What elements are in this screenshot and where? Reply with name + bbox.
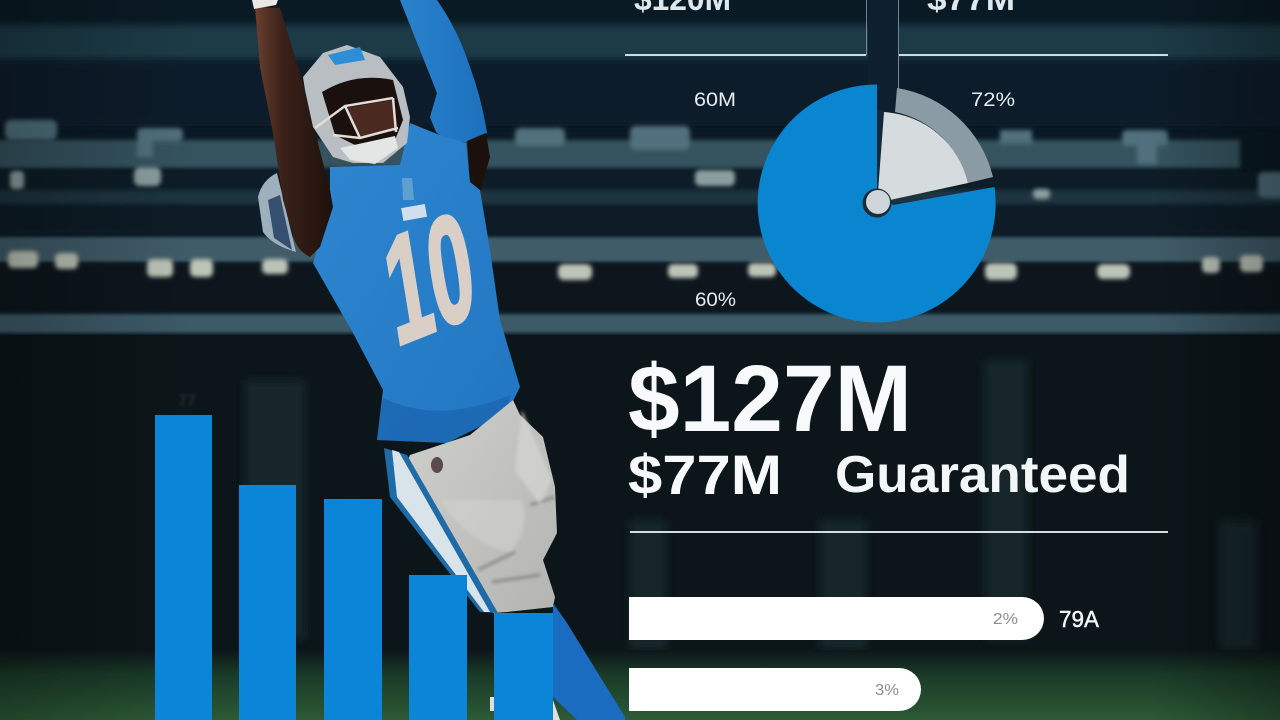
player: wristband: [252, 0, 278, 9]
player: raised right arm sleeve: [400, 0, 487, 142]
pie chart: [758, 84, 996, 322]
pie: grey outer slice: [895, 88, 993, 183]
bar 4: [409, 575, 467, 720]
bar 3: [324, 499, 382, 720]
player: lower leg: [553, 603, 625, 720]
progress bar 1 side label: 79A: [1059, 606, 1100, 632]
player: raised arm: [255, 7, 333, 257]
player: upper arm behind jersey: [467, 133, 490, 192]
headline: guaranteed amount: $77M: [628, 443, 782, 506]
pie label: bottom left: 60%: [695, 290, 736, 311]
player: [252, 0, 625, 720]
divider: [630, 531, 1168, 533]
pie label: top left: 60M: [694, 90, 736, 111]
player: jersey hem shading: [377, 395, 510, 443]
pie: center hub: [862, 188, 892, 218]
pie: dark notch: [877, 110, 884, 192]
bar 5: [494, 613, 553, 720]
progress bar 2: [629, 668, 921, 711]
top divider frame: [625, 0, 1168, 112]
player: pants: [384, 400, 557, 613]
progress bar 1: [629, 597, 1044, 640]
player: back sleeve: [258, 173, 296, 252]
headline: guaranteed label: Guaranteed: [835, 446, 1130, 504]
progress bar 1 value: 2%: [993, 611, 1018, 628]
player: jersey: [313, 123, 520, 443]
progress bar 2 value: 3%: [875, 682, 899, 699]
bar 2: [239, 485, 296, 720]
pie label: top right: 72%: [971, 90, 1015, 111]
player: jersey number: 10: [374, 179, 485, 378]
bar 1: [155, 415, 212, 720]
pie: light inner slice: [878, 112, 968, 200]
player: shoes: [490, 697, 560, 720]
pie: blue slice: [758, 84, 996, 322]
player: chest logo: [401, 178, 427, 221]
headline: total value: $127M: [628, 346, 912, 452]
bar chart faint label: 77: [178, 393, 196, 410]
bar chart: [155, 415, 553, 720]
player: helmet: [303, 45, 410, 164]
